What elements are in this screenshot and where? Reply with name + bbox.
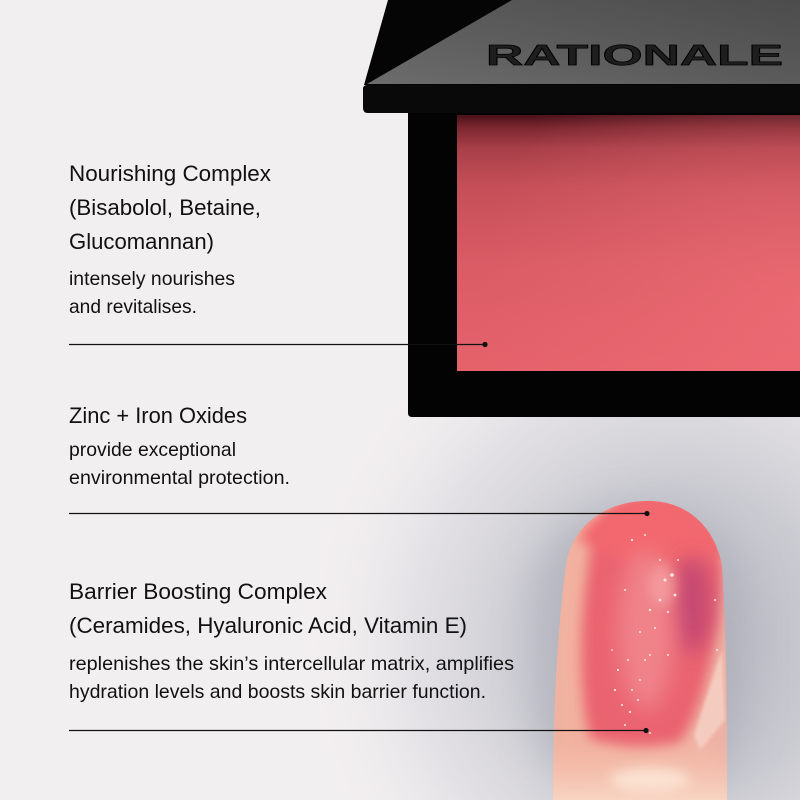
text block: barrier boosting complex — [69, 579, 514, 703]
text block: nourishing complex: (Bisabolol, Betaine, — [69, 195, 261, 220]
callout line: pan — [69, 342, 488, 347]
sparkles — [611, 534, 718, 734]
lid black corner — [364, 0, 800, 85]
text block: nourishing complex: and revitalises. — [69, 296, 197, 318]
side glare — [694, 650, 725, 750]
bright highlight — [649, 563, 675, 607]
callout line: finger base — [69, 728, 649, 733]
compact case — [363, 0, 800, 417]
lid grey facet — [367, 0, 800, 84]
text block: nourishing complex: Nourishing Complex — [69, 161, 272, 186]
text block: zinc and iron oxides: environmental protection. — [69, 467, 290, 489]
blush pan — [457, 115, 800, 371]
background shadow — [382, 417, 800, 800]
deeper pigment — [672, 557, 712, 653]
finger swatch — [553, 501, 727, 800]
brand wordmark: RATIONALE — [486, 40, 783, 72]
fingerprint crease highlight — [610, 768, 690, 792]
text block: nourishing complex: Glucomannan) — [69, 229, 214, 254]
blush colour on skin — [582, 495, 722, 746]
text block: zinc and iron oxides: provide exceptional — [69, 439, 236, 461]
sheen — [618, 550, 674, 710]
text block: barrier boosting complex: (Ceramides, Hyaluronic Acid, Vitamin E) — [69, 613, 467, 638]
lower finger highlight — [553, 761, 727, 800]
lid front edge — [363, 85, 800, 113]
text block: barrier boosting complex: hydration levels and boosts skin barrier function. — [69, 681, 486, 703]
text block: barrier boosting complex: Barrier Boosting Complex — [69, 579, 328, 604]
case body — [408, 113, 800, 417]
tip tint — [575, 501, 720, 556]
text block: nourishing complex: intensely nourishes — [69, 268, 235, 290]
finger skin — [553, 501, 727, 791]
callout line: fingertip — [69, 511, 650, 516]
text block: zinc and iron oxides: Zinc + Iron Oxides — [69, 403, 247, 428]
text block: zinc and iron oxides — [69, 403, 290, 489]
text block: nourishing complex — [69, 161, 272, 318]
text block: barrier boosting complex: replenishes the skin’s intercellular matrix, amplifies — [69, 653, 514, 675]
